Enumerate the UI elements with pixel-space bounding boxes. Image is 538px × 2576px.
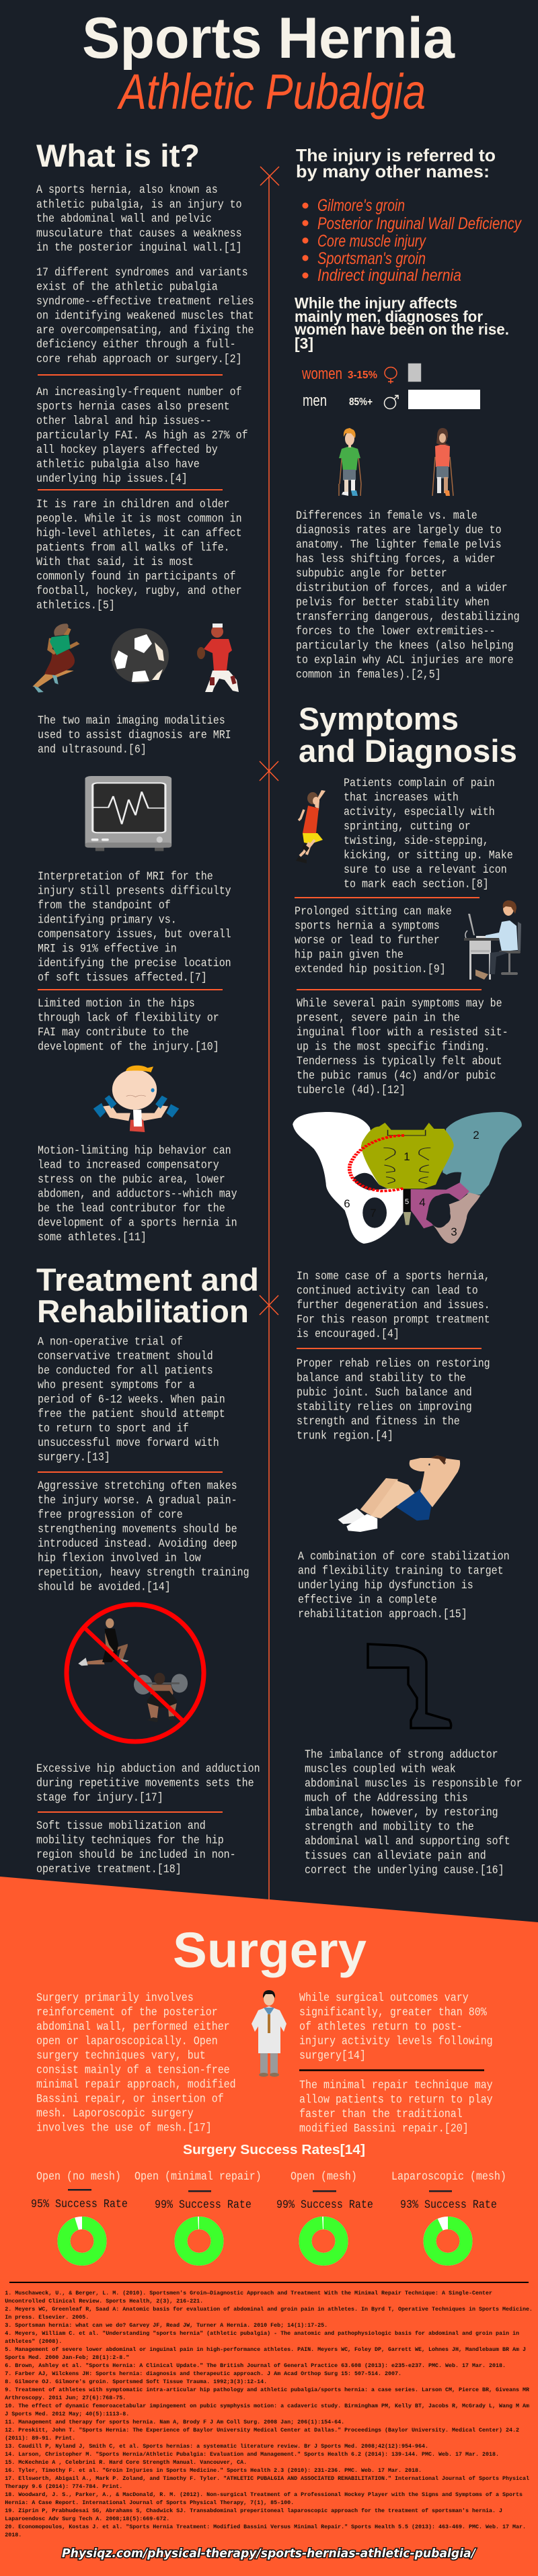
text block: surgical approach: Surgery primarily involves	[36, 1991, 194, 2004]
figure: lunge	[78, 1619, 128, 1666]
text block: conservative treatment: free the patient should attempt	[38, 1407, 225, 1420]
text block: who is affected: patients from all walks of life.	[36, 540, 230, 554]
text block: degeneration: In some case of a sports hernia,	[297, 1269, 490, 1283]
text block: hip abduction: stage for injury.[17]	[36, 1791, 163, 1804]
text block: surgical approach: open or laparoscopically. Open	[36, 2034, 218, 2048]
text block: definition: athletic pubalgia, is an injury to	[36, 198, 242, 211]
diagram: pelvis anatomy: 7	[370, 1207, 377, 1219]
panel: what is it	[32, 138, 254, 1244]
text block: imaging: and ultrasound.[6]	[38, 742, 147, 756]
icon: leg outline	[368, 1644, 451, 1728]
chart: diagnosis rate by sex	[301, 363, 480, 410]
text block: motion limiting: be the lead contributor for the	[38, 1201, 225, 1215]
icon: football player	[197, 624, 239, 692]
references: 8. Gilmore OJ. Gilmore's groin. Sportsmed Soft Tissue Trauma. 1992;3(3):12-14.	[5, 2378, 267, 2385]
text block: definition: in the posterior inguinal wall.[1]	[36, 241, 242, 254]
text block: core stabilization	[298, 1549, 510, 1621]
text block: proper rehab: pubic joint. Such balance and	[297, 1385, 472, 1399]
text block: proper rehab: Proper rehab relies on restoring	[297, 1357, 490, 1370]
text block: prolonged sitting: worse or lead to further	[295, 933, 440, 947]
text block: stretching: hip flexion involved in low	[38, 1551, 201, 1565]
diagram: pelvis anatomy: 2	[473, 1129, 479, 1142]
heading: women diagnoses: mainly men, diagnoses for	[295, 308, 483, 325]
text block: anatomy differences: has less shifting forces, a wider	[296, 552, 496, 566]
text block: stretching: repetition, heavy strength training	[38, 1565, 249, 1579]
text block: anatomy differences: forces to the lower extremities--	[296, 624, 496, 638]
text block: prolonged sitting	[295, 904, 452, 976]
text block: pain description: kicking, or sitting up. Make	[344, 848, 513, 862]
text block: surgical outcomes: surgery[14]	[299, 2049, 366, 2062]
text block: definition: are overcompensating, and fixing the	[36, 323, 254, 337]
panel: surgery	[0, 1877, 538, 2576]
text block: stretching: should be avoided.[14]	[38, 1580, 171, 1594]
text block: minimal repair: faster than the traditional	[299, 2107, 463, 2120]
icon: sit-up figure	[338, 1456, 460, 1532]
text block: mri interpretation: identifying primary vs.	[38, 912, 177, 927]
text block: pain description: sprinting, cutting or	[344, 819, 471, 833]
orange background	[0, 1877, 538, 2576]
text block: surgical approach	[36, 1991, 236, 2135]
text block: who is affected: With that said, it is most	[36, 555, 194, 568]
heading: other names: by many other names:	[296, 161, 490, 181]
text block: conservative treatment: who present symptoms for a	[38, 1378, 195, 1391]
heading: women diagnoses: [3]	[295, 335, 313, 352]
text block: imaging: used to assist diagnosis are MRI	[38, 728, 231, 742]
references: 4. Meyers, William C. et al. "Understanding "sports hernia" (athletic pubalgia) - The anatomic and pathophysiologic basis for abdominal and groin pain in	[5, 2330, 519, 2337]
references	[5, 2290, 533, 2538]
references: 3. Sportsman hernia: what can we do? Garvey JF, Read JW, Turner A Hernia. 2010 Feb; 14(1):17-25.	[5, 2322, 328, 2329]
text block: anatomy differences: subpubic angle for better	[296, 566, 447, 580]
text block: motion limiting: stress on the pubic area, lower	[38, 1172, 225, 1186]
text block: definition: on identifying weakened muscles that	[36, 308, 254, 323]
chart: diagnosis rate by sex: 3-15%	[348, 370, 377, 381]
heading: surgery: Surgery	[173, 1922, 367, 1978]
chart: open minimal repair: Open (minimal repair)	[134, 2170, 262, 2183]
references: Laparoendosc Adv Surg Tech A. 2008;18(5):669-672.	[5, 2516, 169, 2522]
text block: anatomy differences: transferring dangerous, destabilizing	[296, 609, 520, 624]
references: 20. Economopoulos, Kostas J. et al. "Sports Hernia Treatment: Modified Bassini Versus Minimal Repair." Sports Health 5.5 (2013): 463-469. PMC. Web. 17 Mar.	[5, 2524, 526, 2530]
text block: who is affected: people. While it is most common in	[36, 511, 242, 525]
text block: core stabilization: and flexibility training to target	[298, 1563, 504, 1578]
chart: diagnosis rate by sex: men	[303, 392, 327, 410]
text block: mri interpretation: Interpretation of MRI for the	[38, 869, 213, 883]
text block: definition: A sports hernia, also known as	[36, 183, 218, 196]
text block: proper rehab: balance and stability to the	[297, 1371, 466, 1385]
title: Sports Hernia	[82, 6, 455, 71]
text block: motion limiting: Motion-limiting hip behavior can	[38, 1144, 231, 1157]
text block: degeneration	[297, 1269, 490, 1340]
references: 1. Muschaweck, U., & Berger, L. M. (2010). Sportsmen's Groin—Diagnostic Approach and Treatment With the Minimal Repair Technique: A Single-Center	[5, 2290, 492, 2296]
text block: minimal repair: modified Bassini repair.[20]	[299, 2121, 469, 2135]
text block: imaging: The two main imaging modalities	[38, 714, 225, 727]
text block: surgical approach: consist mainly of a tension-free	[36, 2063, 230, 2077]
text block: hip issues: all hockey players affected by	[36, 443, 218, 456]
text block: who is affected: It is rare in children and older	[36, 497, 230, 511]
references: 12. Preskitt, John T. "Sports Hernia: The Experience of Baylor University Medical Center at Dallas." Proceedings (Baylor University. Medical Center) 24.2	[5, 2427, 519, 2434]
text block: conservative treatment: A non-operative trial of	[38, 1334, 183, 1348]
text block: motion limiting: some athletes.[11]	[38, 1230, 147, 1244]
text block: hip issues	[36, 385, 248, 485]
diagram: pelvis anatomy: 6	[344, 1197, 350, 1210]
text block: mri interpretation	[38, 869, 231, 984]
references: 19. Ziprin P, Prabhudesai SG, Abrahams S, Chadwick SJ. Transabdominal preperitoneal laparoscopic approach for the treatment of sportsman's hernia. J	[5, 2507, 502, 2514]
references: Sports Med. 2000 Jan-Feb; 28(1):2-8."	[5, 2354, 129, 2361]
chart: open mesh: 99% Success Rate	[276, 2198, 373, 2211]
text block: proper rehab	[297, 1357, 490, 1443]
list: alternative names: Core muscle injury	[317, 232, 426, 251]
text block: proper rehab: stability relies on improving	[297, 1400, 472, 1414]
text block: who is affected: high-level athletes, it can affect	[36, 526, 242, 540]
text block: limited motion: FAI may contribute to the	[38, 1025, 189, 1039]
heading: other names	[296, 145, 496, 181]
text block: limited motion: Limited motion in the hips	[38, 996, 195, 1010]
text block: conservative treatment: to return to sport and if	[38, 1421, 189, 1435]
references: Uncontrolled Clinical Review. Sports Health, 2(3), 216-221.	[5, 2298, 203, 2305]
heading: symptoms and diagnosis: Symptoms	[299, 701, 459, 736]
text block: who is affected: athletics.[5]	[36, 598, 115, 612]
references: 14. Larson, Christopher M. "Sports Hernia/Athletic Pubalgia: Evaluation and Management." Sports Health 6.2 (2014): 139-144. PMC. Web. 17 Mar. 2018.	[5, 2451, 499, 2458]
text block: hip abduction: during repetitive movements sets the	[36, 1776, 254, 1790]
text block: minimal repair: The minimal repair technique may	[299, 2078, 493, 2092]
text block: soft tissue: Soft tissue mobilization and	[36, 1819, 206, 1832]
icon: runner	[32, 624, 78, 693]
text block: anatomy differences: distribution of forces, and a wider	[296, 581, 508, 595]
diagram: pelvis anatomy	[293, 1112, 522, 1244]
references: In press. Elsevier. 2005.	[5, 2314, 89, 2321]
icon: prohibited exercises	[67, 1604, 204, 1742]
text block: stretching: free progression of core	[38, 1508, 183, 1521]
text block: stretching	[38, 1479, 249, 1594]
text block: pain location: Tenderness is typically felt about	[297, 1054, 502, 1068]
text block: anatomy differences: diagnosis rates are largely due to	[296, 523, 502, 537]
text block: hip issues: An increasingly-frequent number of	[36, 385, 242, 398]
text block: pain description: that increases with	[344, 790, 459, 804]
text block: motion limiting: abdomen, and adductors--which may	[38, 1187, 237, 1201]
panel: symptoms and diagnosis	[293, 701, 523, 1877]
text block: who is affected: commonly found in participants of	[36, 569, 236, 583]
text block: definition: core rehab approach or surgery.[2]	[36, 352, 242, 366]
text block: pain description: twisting, side-stepping,	[344, 834, 489, 847]
text block: motion limiting: lead to increased compensatory	[38, 1158, 219, 1172]
references: 18. Woodward, J. S., Parker, A., & MacDonald, R. M. (2012). Non-surgical Treatment of a Professional Hockey Player with the Signs and Symptoms of a Sports	[5, 2491, 523, 2498]
text block: adductor imbalance: imbalance, however, by restoring	[305, 1805, 498, 1819]
text block: surgical approach: surgery techniques vary, but	[36, 2049, 206, 2062]
text block: pain description: to mark each section.[8]	[344, 877, 489, 891]
text block: mri interpretation: injury still presents difficulty	[38, 884, 231, 898]
text block: surgical outcomes: significantly, greater than 80%	[299, 2005, 487, 2019]
text block: anatomy differences: to explain why ACL injuries are more	[296, 653, 514, 667]
panel: other names	[294, 145, 522, 681]
text block: stretching: strengthening movements should be	[38, 1522, 237, 1536]
chart: open no mesh: Open (no mesh)	[36, 2170, 121, 2183]
icon: handball player	[296, 790, 325, 863]
icon: mri monitor	[85, 776, 171, 851]
text block: imaging	[38, 714, 231, 756]
text block: surgical approach: mesh. Laporoscopic surgery	[36, 2106, 194, 2120]
text block: adductor imbalance: abdominal wall and supporting soft	[305, 1834, 510, 1848]
text block: adductor imbalance: muscles coupled with weak	[305, 1762, 456, 1776]
text block: minimal repair: allow patients to return to play	[299, 2092, 493, 2106]
text block: core stabilization: A combination of core stabilization	[298, 1549, 510, 1563]
references: 2018.	[5, 2532, 22, 2538]
chart: diagnosis rate by sex: women	[301, 365, 342, 383]
text block: soft tissue: region should be included in non-	[36, 1848, 236, 1861]
text block: proper rehab: trunk region.[4]	[297, 1428, 393, 1443]
references: 13. Caudill P, Nyland J, Smith C, et al. Sports hernias: a systematic literature review. Br J Sports Med. 2008;42(12):954-964.	[5, 2443, 428, 2450]
text block: definition	[36, 183, 254, 366]
text block: anatomy differences: pelvis for better stability when	[296, 595, 490, 609]
text block: definition: musculature that causes a weakness	[36, 226, 242, 240]
text block: pain location: up is the most specific finding.	[297, 1039, 490, 1054]
icon: soccer ball	[111, 628, 169, 683]
text block: adductor imbalance: much of the Addressing this	[305, 1791, 468, 1805]
text block: limited motion	[38, 996, 219, 1054]
references: 15. McKechnie A , Celebrini R. Hard Core Strength Manual. Vancouver, CA.	[5, 2459, 247, 2466]
text block: surgical approach: minimal repair approach, modified	[36, 2077, 236, 2091]
text block: prolonged sitting: sports hernia a symptoms	[295, 918, 440, 933]
text block: soft tissue: operative treatment.[18]	[36, 1862, 182, 1876]
heading: surgery success rates: Surgery Success Rates[14]	[183, 2143, 365, 2157]
references: Hernia: A Case Report. International Journal of Sports Physical Therapy, 7(1), 85-100.	[5, 2499, 294, 2506]
heading: what is it: What is it?	[36, 138, 200, 173]
text block: hip issues: underlying hip issues.[4]	[36, 472, 188, 485]
diagram: pelvis anatomy: 3	[451, 1226, 457, 1238]
heading: treatment and rehabilitation: Treatment and	[36, 1262, 259, 1297]
references: 11. Management and therapy for sports hernia. Nam A, Brody F J Am Coll Surg. 2008 Jan; 206(1):154-64.	[5, 2419, 344, 2425]
text block: core stabilization: rehabilitation approach.[15]	[298, 1607, 467, 1621]
text block: conservative treatment: be conducted for all patients	[38, 1363, 213, 1377]
heading: women diagnoses: women have been on the rise.	[294, 320, 509, 338]
diagram: pelvis anatomy: 1	[404, 1150, 410, 1163]
text block: stretching: Aggressive stretching often makes	[38, 1479, 237, 1492]
text block: adductor imbalance: abdominal muscles is responsible for	[305, 1776, 523, 1790]
text block: who is affected: football, hockey, rugby, and other	[36, 584, 242, 597]
chart: diagnosis rate by sex: 85%+	[349, 396, 373, 408]
chart: open no mesh	[31, 2170, 128, 2259]
text block: hip abduction	[36, 1762, 260, 1804]
list: alternative names: Indirect inguinal hernia	[317, 266, 461, 285]
text block: anatomy differences: Differences in female vs. male	[296, 509, 477, 522]
text block: definition: exist of the athletic pubalgia	[36, 280, 218, 294]
chart: open no mesh: 95% Success Rate	[31, 2197, 128, 2210]
text block: surgical outcomes	[299, 1991, 493, 2062]
heading: other names: The injury is referred to	[296, 145, 496, 165]
text block: soft tissue: mobility techniques for the hip	[36, 1833, 224, 1847]
text block: surgical approach: abdominal wall, performed either	[36, 2020, 230, 2033]
references: 2. Meyers WC, Greenleaf R, Saad A: Anatomic basis for evaluation of abdominal and groin pain in athletes. In Byrd T, Operative Techniques in Sports Medicine.	[5, 2306, 533, 2313]
heading: treatment and rehabilitation: Rehabilitation	[37, 1293, 249, 1329]
references: 10. The effect of dynamic femoroacetabular impingement on pubic symphysis motion: a cadaveric study. Birmingham PM, Kelly BT, Jacobs R, McGrady L, Wang M Am	[5, 2403, 529, 2409]
text block: pain location: present, severe pain in the	[297, 1011, 460, 1025]
chart: open minimal repair: 99% Success Rate	[155, 2198, 252, 2211]
chart: open mesh: Open (mesh)	[291, 2170, 357, 2183]
text block: mri interpretation: MRI is 91% effective in	[38, 941, 177, 955]
text block: definition: 17 different syndromes and variants	[36, 265, 248, 279]
text block: prolonged sitting: extended hip position.[9]	[295, 962, 446, 976]
text block: conservative treatment: period of 6-12 weeks. When pain	[38, 1392, 225, 1406]
diagram: pelvis anatomy: 5	[405, 1198, 409, 1206]
text block: hip issues: athletic pubalgia also have	[36, 457, 200, 471]
references: 5. Management of severe lower abdominal or inguinal pain in high-performance athletes. PAIN. Meyers WC, Foley DP, Garrett WE, Lohnes JH, Mandlebaum BR Am J	[5, 2346, 526, 2353]
references: 9. Treatment of athletes with symptomatic intra-articular hip pathology and athletic pubalgia/sports hernia: a case series. Larson CM, Pierce BR, Giveans MR	[5, 2387, 529, 2393]
list: alternative names	[303, 196, 522, 285]
icon: doctor	[252, 1990, 286, 2077]
references: athletes" (2008).	[5, 2338, 62, 2345]
chart: laparoscopic mesh: 93% Success Rate	[400, 2198, 497, 2211]
text block: pain location: inguinal floor with a resisted sit-	[297, 1025, 508, 1039]
title	[82, 6, 455, 120]
text block: surgical outcomes: of athletes return to post-	[299, 2020, 463, 2033]
text block: stretching: the injury worse. A gradual pain-	[38, 1493, 237, 1507]
footer url: Physiqz.com/physical-therapy/sports-hernias-athletic-pubalgia/	[62, 2546, 476, 2561]
text block: core stabilization: underlying hip dysfunction is	[298, 1578, 473, 1592]
text block: mri interpretation: from the standpoint of	[38, 898, 171, 912]
text block: limited motion: through lack of flexibility or	[38, 1011, 219, 1025]
chart: open minimal repair	[134, 2170, 262, 2259]
chart: laparoscopic mesh: Laparoscopic (mesh)	[391, 2170, 506, 2183]
text block: who is affected	[36, 497, 242, 612]
text block: conservative treatment: conservative treatment should	[38, 1349, 213, 1363]
text block: soft tissue	[36, 1819, 236, 1876]
references: Therapy 9.6 (2014): 774-784. Print.	[5, 2483, 122, 2490]
text block: hip issues: particularly FAI. As high as 27% of	[36, 428, 248, 442]
chart: laparoscopic mesh	[391, 2170, 506, 2259]
text block: prolonged sitting: hip pain given the	[295, 947, 404, 961]
heading: treatment and rehabilitation	[36, 1262, 259, 1329]
references: 17. Ellsworth, Abigail A., Mark P. Zoland, and Timothy F. Tyler. "ATHLETIC PUBALGIA AND ASSOCIATED REHABILITATION." International Journal of Sports Physical	[5, 2475, 529, 2482]
text block: motion limiting	[38, 1144, 237, 1244]
text block: adductor imbalance: tissues can alleviate pain and	[305, 1848, 486, 1862]
list: alternative names: Sportsman's groin	[317, 249, 426, 268]
text block: proper rehab: strength and fitness in the	[297, 1414, 460, 1428]
text block: anatomy differences: anatomy. The lighter female pelvis	[296, 538, 502, 551]
text block: hip issues: sports hernia cases also present	[36, 399, 230, 413]
text block: pain description: Patients complain of pain	[344, 776, 495, 789]
text block: minimal repair	[299, 2078, 493, 2135]
text block: mri interpretation: compensatory issues, but overall	[38, 927, 231, 941]
heading: symptoms and diagnosis	[299, 701, 517, 769]
text block: conservative treatment	[38, 1334, 225, 1464]
text block: adductor imbalance: strength and mobility to the	[305, 1819, 474, 1834]
central divider line with x markers	[260, 167, 279, 1899]
text block: anatomy differences: particularly the knees (also helping	[296, 638, 514, 652]
text block: motion limiting: development of a sports hernia in	[38, 1215, 237, 1230]
text block: prolonged sitting: Prolonged sitting can make	[295, 904, 452, 918]
diagram: pelvis anatomy: 4	[419, 1196, 426, 1209]
title: Athletic Pubalgia	[117, 64, 426, 120]
text block: anatomy differences: common in females).[2,5]	[296, 667, 441, 681]
text block: surgical approach: involves the use of mesh.[17]	[36, 2120, 212, 2135]
references: (2011): 89-91. Print.	[5, 2435, 75, 2442]
text block: degeneration: For this reason prompt treatment	[297, 1312, 490, 1326]
text block: surgical outcomes: injury activity levels following	[299, 2034, 493, 2048]
text block: degeneration: further degeneration and issues.	[297, 1298, 490, 1312]
text block: pain location: the pubic ramus (4c) and/or pubic	[297, 1068, 496, 1082]
references: 16. Tyler, Timothy F. et al. "Groin Injuries in Sports Medicine." Sports Health 2.3 (2010): 231-236. PMC. Web. 17 Mar. 2018.	[5, 2467, 422, 2474]
text block: conservative treatment: surgery.[13]	[38, 1450, 110, 1464]
chart: open mesh	[276, 2170, 373, 2259]
text block: pain description: sure to use a relevant icon	[344, 863, 507, 876]
references: 7. Farber AJ, Wilckens JH: Sports hernia: diagnosis and therapeutic approach. J Am Acad Orthop Surg 15: 507-514. 2007.	[5, 2370, 401, 2377]
text block: pain location: While several pain symptoms may be	[297, 996, 502, 1010]
figure: squat	[134, 1673, 188, 1722]
text block: pain location: tubercle (4d).[12]	[297, 1083, 406, 1097]
text block: stretching: introduced instead. Avoiding deep	[38, 1537, 237, 1550]
text block: mri interpretation: of soft tissues affected.[7]	[38, 970, 207, 984]
text block: mri interpretation: identifying the precise location	[38, 956, 231, 970]
text block: conservative treatment: unsuccessful move forward with	[38, 1436, 219, 1449]
text block: surgical outcomes: While surgical outcomes vary	[299, 1991, 469, 2004]
text block: hip issues: other labral and hip issues--	[36, 414, 212, 427]
text block: limited motion: development of the injury.[10]	[38, 1039, 219, 1054]
text block: anatomy differences	[296, 509, 520, 681]
text block: pain description	[344, 776, 513, 891]
text block: surgical approach: reinforcement of the posterior	[36, 2005, 218, 2019]
text block: definition: syndrome--effective treatment relies	[36, 294, 254, 308]
references: J Sports Med. 2012 May; 40(5):1113-8.	[5, 2411, 129, 2417]
heading: women diagnoses: While the injury affects	[295, 294, 457, 312]
icon: boy on crutches	[339, 428, 361, 496]
text block: degeneration: is encouraged.[4]	[297, 1327, 399, 1340]
text block: degeneration: continued activity can lead to	[297, 1283, 478, 1297]
text block: adductor imbalance: The imbalance of strong adductor	[305, 1748, 498, 1761]
icon: girl on crutches	[432, 428, 453, 496]
text block: definition: the abdominal wall and pelvic	[36, 212, 212, 225]
text block: core stabilization: effective in a complete	[298, 1592, 437, 1606]
references: 6. Brown, Ashley et al. "Sports Hernia: A Clinical Update." The British Journal of General Practice 63.608 (2013): e235-e237. PMC. Web. 17 Mar. 2018.	[5, 2362, 506, 2369]
text block: hip abduction: Excessive hip abduction and adduction	[36, 1762, 260, 1775]
icon: cartoon weightlifter	[93, 1066, 179, 1132]
text block: surgical approach: Bassini repair, or insertion of	[36, 2092, 224, 2106]
references: Arthroscopy. 2011 Jun; 27(6):768-75.	[5, 2395, 126, 2401]
list: alternative names: Gilmore's groin	[317, 196, 405, 215]
text block: adductor imbalance	[305, 1748, 523, 1877]
text block: pain description: activity, especially with	[344, 805, 495, 818]
text block: pain location	[297, 996, 508, 1097]
heading: women diagnoses	[294, 294, 509, 352]
heading: symptoms and diagnosis: and Diagnosis	[299, 733, 517, 769]
panel: treatment and rehabilitation	[36, 1262, 260, 1876]
text block: adductor imbalance: correct the underlying cause.[16]	[305, 1863, 504, 1877]
text block: definition: deficiency either through a full-	[36, 337, 236, 351]
icon: person at desk	[464, 900, 521, 980]
